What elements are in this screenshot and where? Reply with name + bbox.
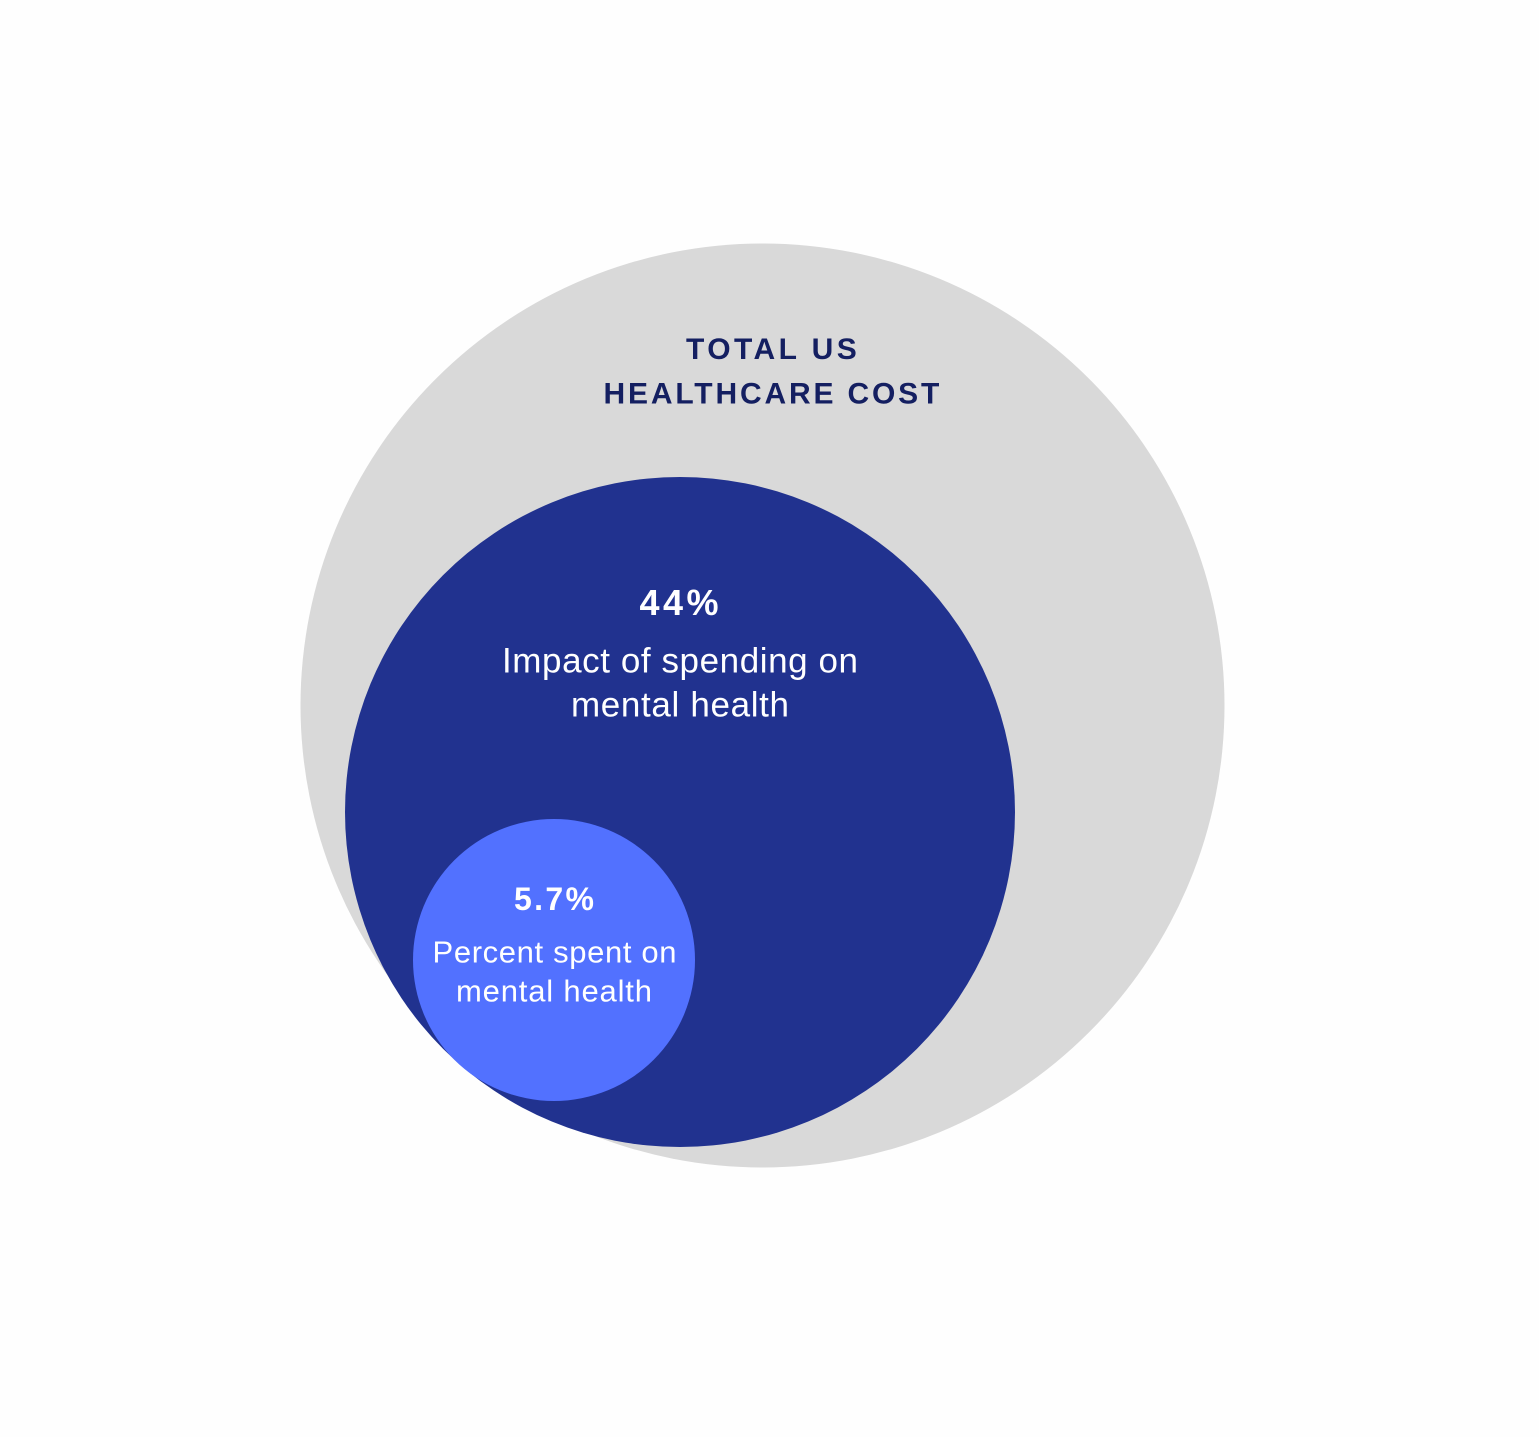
stat: 5.7% percent spent on mental health: [432, 881, 676, 1008]
stat: 5.7% percent spent on mental health: mental health: [456, 974, 652, 1008]
heading: total US healthcare cost: HEALTHCARE COST: [604, 378, 942, 410]
stat: 44% impact of spending on mental health: [502, 582, 858, 724]
stat: 44% impact of spending on mental health: Impact of spending on: [502, 642, 858, 680]
stat: 44% impact of spending on mental health: 44%: [640, 582, 720, 623]
stat: 5.7% percent spent on mental health: 5.7%: [514, 881, 596, 917]
heading: total US healthcare cost: TOTAL US: [686, 333, 860, 366]
panel: total US healthcare cost circle: [300, 244, 1224, 1168]
panel: percent spent circle: [413, 819, 695, 1101]
stat: 44% impact of spending on mental health: mental health: [571, 686, 789, 724]
stat: 5.7% percent spent on mental health: Percent spent on: [432, 934, 676, 970]
panel: impact of spending circle: [345, 477, 1015, 1147]
heading: total US healthcare cost: [604, 333, 942, 410]
